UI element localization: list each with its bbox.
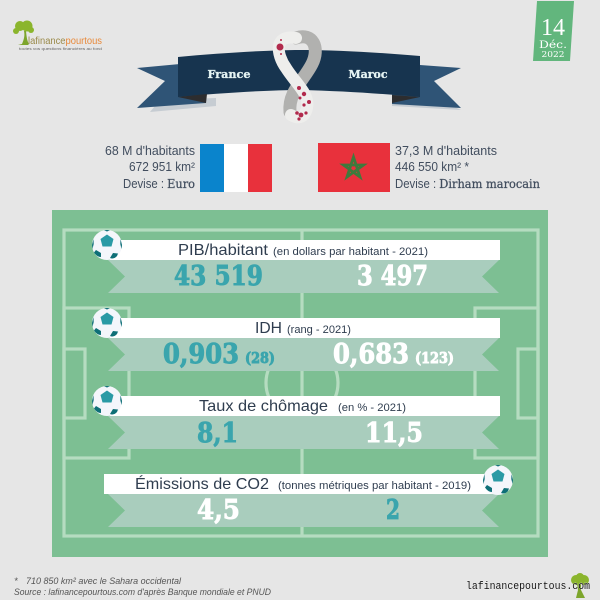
row: Taux de chômage <box>92 386 500 449</box>
banner folds <box>178 94 420 103</box>
date badge: 2022 <box>542 50 564 59</box>
ribbon <box>108 494 499 527</box>
Maroc facts: Devise : Dirham marocain <box>395 176 540 191</box>
value Maroc: 0,683 <box>333 339 409 370</box>
icon: ball <box>483 465 513 495</box>
France facts: 68 M d'habitants <box>105 144 195 158</box>
title: (en % - 2021) <box>338 402 406 414</box>
value Maroc: (123) <box>415 349 454 367</box>
icon: ball <box>92 230 122 260</box>
Maroc facts <box>395 144 540 191</box>
banner tail left <box>137 64 216 112</box>
date badge: Déc. <box>539 39 567 51</box>
label France: France <box>208 68 250 81</box>
title bar <box>110 396 500 416</box>
title: Émissions de CO2 <box>135 474 269 493</box>
logo: lafinancepourtous: lafinancepourtous <box>28 36 102 47</box>
footnote and source: 710 850 km² avec le Sahara occidental <box>26 576 182 587</box>
value France: 43 519 <box>174 261 263 292</box>
title bar <box>110 240 500 260</box>
row: PIB/habitant <box>92 230 500 293</box>
banner: France / Maroc <box>137 50 461 112</box>
title: (en dollars par habitant - 2021) <box>273 246 428 258</box>
title: PIB/habitant <box>178 242 269 259</box>
emblem: World Cup 2022 ribbon <box>276 37 315 121</box>
value France: 4,5 <box>197 495 240 526</box>
value France: 8,1 <box>197 418 238 449</box>
row: IDH <box>92 308 500 371</box>
title bar <box>104 474 500 494</box>
France facts: 672 951 km² <box>129 160 195 174</box>
icon: ball <box>92 308 122 338</box>
icon: ball <box>92 386 122 416</box>
title bar <box>110 318 500 338</box>
France facts <box>105 144 195 191</box>
banner main band <box>178 50 420 97</box>
date badge <box>533 1 574 61</box>
title: IDH <box>255 320 282 337</box>
value France: (28) <box>245 349 275 367</box>
title: Taux de chômage <box>199 398 328 415</box>
value Maroc: 2 <box>386 495 400 526</box>
date badge: 14 <box>541 15 565 41</box>
ribbon <box>108 416 499 449</box>
flag: Maroc <box>318 143 390 192</box>
footnote and source: * <box>14 576 18 587</box>
value France: 0,903 <box>163 339 239 370</box>
footnote and source: Source : lafinancepourtous.com d'après Banque mondiale et PNUD <box>14 587 271 598</box>
label Maroc: Maroc <box>348 68 388 81</box>
logo: lafinancepourtous.com footer <box>466 573 590 598</box>
logo: lafinancepourtous <box>13 20 102 51</box>
logo: lafinancepourtous: toutes vos questions financières au fond <box>19 47 102 51</box>
footnote and source <box>14 576 271 598</box>
flag: France <box>200 144 272 192</box>
Maroc facts: 446 550 km² * <box>395 160 469 174</box>
value Maroc: 11,5 <box>365 418 423 449</box>
value Maroc: 3 497 <box>357 261 428 292</box>
banner tail right <box>392 65 461 110</box>
ribbon <box>108 338 499 371</box>
title: (tonnes métriques par habitant - 2019) <box>278 480 471 492</box>
row: Émissions de CO2 <box>104 465 513 527</box>
panel: football pitch <box>52 210 548 557</box>
France facts: Devise : Euro <box>123 176 195 191</box>
Maroc facts: 37,3 M d'habitants <box>395 144 497 158</box>
ribbon <box>108 260 499 293</box>
title: (rang - 2021) <box>287 324 351 336</box>
